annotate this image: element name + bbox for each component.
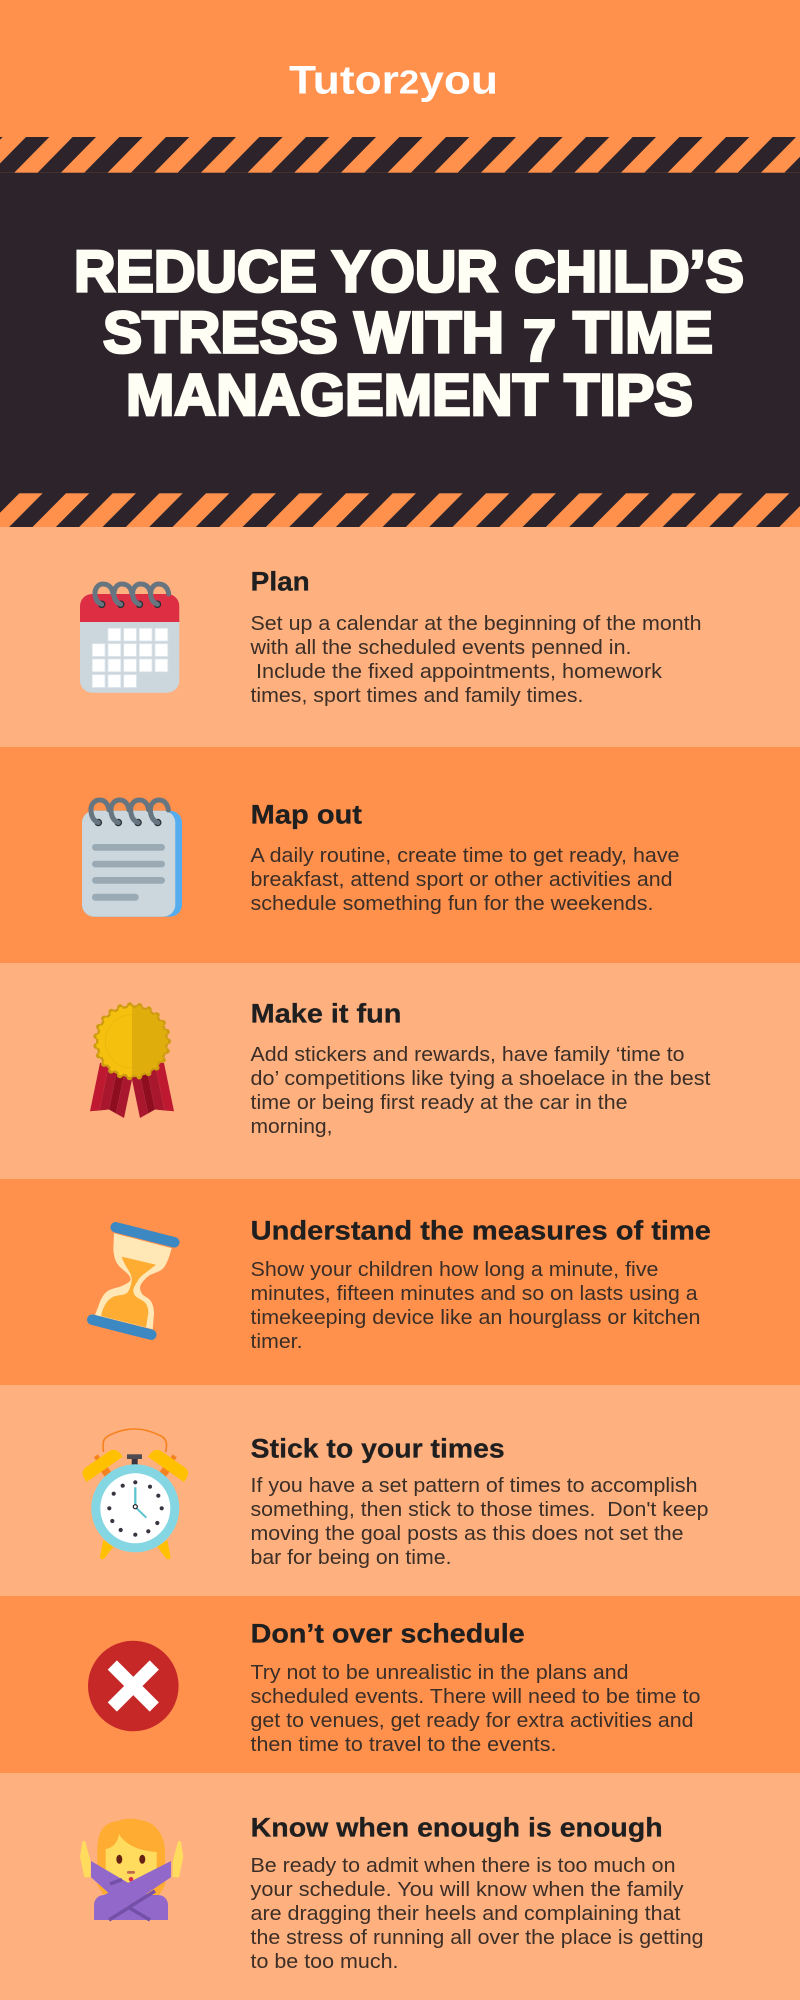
text: Plan body — [249, 612, 702, 707]
icon: medal — [90, 1005, 174, 1118]
icon: hourglass — [92, 1227, 174, 1335]
title: STRESS WITH — [103, 300, 504, 365]
text: Plan body: with all the scheduled events penned in. — [249, 636, 632, 659]
heading: Map out: Map out — [251, 799, 362, 829]
text: Understand body: minutes, fifteen minutes and so on lasts using a — [250, 1282, 698, 1305]
text: Stick body: bar for being on time. — [250, 1546, 452, 1569]
text: Understand body: timer. — [250, 1330, 302, 1353]
text: Plan body: Set up a calendar at the beginning of the month — [250, 612, 702, 635]
text: Understand body — [250, 1258, 700, 1353]
text: Know when body: the stress of running all over the place is getting — [250, 1926, 704, 1949]
text: Know when body: to be too much. — [250, 1950, 398, 1973]
text: Know when body — [250, 1854, 704, 1973]
text: Know when body: your schedule. You will know when the family — [250, 1878, 684, 1901]
hazard stripes bottom — [0, 493, 800, 527]
panel: Plan — [0, 527, 800, 747]
text: Make it fun body: morning, — [250, 1115, 332, 1138]
text: Don't over schedule body: get to venues, get ready for extra activities and — [250, 1709, 694, 1732]
text: Map out body: schedule something fun for the weekends. — [250, 892, 654, 915]
text: Make it fun body: do’ competitions like tying a shoelace in the best — [250, 1067, 711, 1090]
icon: red cross — [88, 1641, 179, 1731]
heading: Don't over schedule: Don’t over schedule — [251, 1618, 525, 1648]
text: Stick body — [250, 1474, 708, 1569]
panel: Know when enough is enough — [0, 1773, 800, 2000]
title — [74, 240, 744, 428]
text: Don't over schedule body: then time to travel to the events. — [250, 1733, 556, 1756]
text: Plan body: Include the fixed appointments, homework — [256, 660, 663, 683]
title: TIME — [573, 300, 713, 365]
heading: Know when enough is enough: Know when enough is enough — [251, 1813, 663, 1843]
text: Stick body: moving the goal posts as this does not set the — [250, 1522, 684, 1545]
text: Stick body: something, then stick to those times. Don't keep — [250, 1498, 708, 1521]
panel: Understand the measures of time — [0, 1179, 800, 1385]
text: Understand body: timekeeping device like an hourglass or kitchen — [250, 1306, 700, 1329]
header: brand band — [0, 0, 800, 137]
text: Don't over schedule body: scheduled events. There will need to be time to — [250, 1685, 700, 1708]
icon: person crossing arms — [80, 1819, 183, 1920]
text: Know when body: Be ready to admit when there is too much on — [250, 1854, 676, 1877]
panel: Don't over schedule — [0, 1596, 800, 1773]
text: Make it fun body: Add stickers and rewards, have family ‘time to — [250, 1043, 684, 1066]
panel: title banner — [0, 137, 800, 527]
text: Map out body: breakfast, attend sport or other activities and — [250, 868, 672, 891]
text: Plan body: times, sport times and family times. — [250, 684, 584, 707]
text: Stick body: If you have a set pattern of times to accomplish — [250, 1474, 698, 1497]
title: MANAGEMENT TIPS — [126, 363, 693, 428]
text: Don't over schedule body — [250, 1661, 700, 1756]
panel: Stick to your times — [0, 1385, 800, 1596]
hazard stripes top — [0, 137, 800, 173]
icon: calendar — [80, 584, 179, 693]
panel: Make it fun — [0, 963, 800, 1179]
text: Know when body: are dragging their heels and complaining that — [250, 1902, 681, 1925]
brand name: Tutor 2you — [289, 59, 498, 103]
heading: Understand the measures of time: Understand the measures of time — [251, 1215, 711, 1245]
panel: Map out — [0, 747, 800, 963]
title: 7 — [523, 308, 556, 374]
text: Understand body: Show your children how long a minute, five — [250, 1258, 658, 1281]
icon: notepad — [82, 800, 182, 917]
text: Make it fun body: time or being first ready at the car in the — [250, 1091, 628, 1114]
heading: Plan: Plan — [251, 567, 310, 597]
text: Don't over schedule body: Try not to be unrealistic in the plans and — [250, 1661, 628, 1684]
title: REDUCE YOUR CHILD’S — [74, 240, 744, 304]
icon: alarm clock — [82, 1429, 188, 1559]
text: Map out body: A daily routine, create time to get ready, have — [250, 844, 680, 867]
heading: Make it fun: Make it fun — [251, 999, 401, 1029]
text: Make it fun body — [250, 1043, 711, 1138]
heading: Stick to your times: Stick to your times — [251, 1433, 505, 1463]
text: Map out body — [250, 844, 680, 915]
